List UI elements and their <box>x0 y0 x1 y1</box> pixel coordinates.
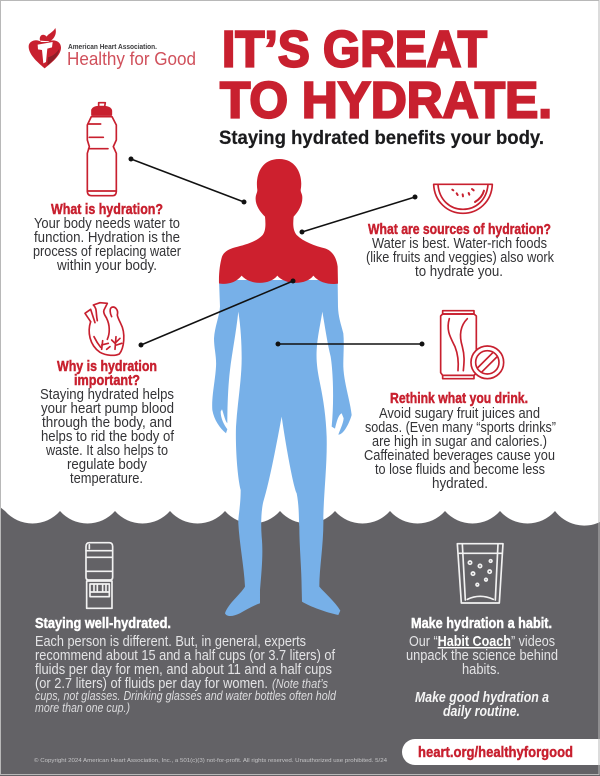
text block: what is hydration <box>33 202 181 274</box>
logo line 2: Healthy for Good <box>67 48 196 69</box>
text block: staying well-hydrated: (or 2.7 liters) of fluids per day for women. <box>35 676 268 692</box>
title <box>220 20 552 128</box>
logo line 1: American Heart Association. <box>68 44 157 51</box>
text block: staying well-hydrated: more than one cup.) <box>35 701 130 715</box>
subtitle: Staying hydrated benefits your body. <box>219 128 544 149</box>
callout line: what is hydration <box>128 156 246 204</box>
text block: what is hydration: within your body. <box>56 258 157 274</box>
callout line: why important <box>138 278 296 348</box>
text block: why is hydration important: helps to rid the body of <box>41 429 175 445</box>
text block: rethink what you drink <box>364 391 556 492</box>
copyright: © Copyright 2024 American Heart Association, Inc., a 501(c)(3) not-for-profit. All rights reserved. Unauthorized use prohibited. 5/24 <box>34 757 387 764</box>
text block: staying well-hydrated: fluids per day for men, and about 11 and a half cups <box>35 662 332 678</box>
human body figure <box>212 159 352 616</box>
text block: staying well-hydrated: Staying well-hydrated. <box>35 616 171 632</box>
body: red head and shoulders <box>219 159 338 284</box>
text block: make hydration a habit: Make hydration a habit. <box>411 616 552 632</box>
text block: rethink what you drink: are high in sugar and calories.) <box>372 434 547 450</box>
icon: glass of water <box>457 544 503 603</box>
logo: American Heart Association Healthy for Good <box>29 28 196 69</box>
text block: staying well-hydrated: recommend about 15 and a half cups (or 3.7 liters) of <box>35 648 336 664</box>
text block: why is hydration important: temperature. <box>70 471 143 487</box>
icon: watermelon slice <box>434 184 492 213</box>
text block: why is hydration important: Why is hydration <box>57 359 157 375</box>
text block: sources of hydration: Water is best. Water-rich foods <box>372 236 547 252</box>
text block: sources of hydration: to hydrate you. <box>415 264 503 280</box>
text block: make hydration a habit: Our “Habit Coach” videos <box>409 634 555 650</box>
text block: rethink what you drink: sodas. (Even many “sports drinks” <box>365 420 556 436</box>
text block: why is hydration important: through the body, and <box>42 415 172 431</box>
text block: what is hydration: What is hydration? <box>51 202 163 218</box>
text block: why is hydration important: waste. It also helps to <box>45 443 168 459</box>
text block: rethink what you drink: Rethink what you drink. <box>390 391 528 407</box>
icon: water cooler <box>86 543 113 608</box>
text block: sources of hydration: What are sources of hydration? <box>368 222 551 238</box>
text block: sources of hydration <box>366 222 555 280</box>
text block: what is hydration: function. Hydration is the <box>34 230 180 246</box>
text block: why is hydration important: Staying hydrated helps <box>40 387 174 403</box>
text block: make hydration a habit: Make good hydration a <box>415 690 549 706</box>
text block: rethink what you drink: Avoid sugary fruit juices and <box>379 406 540 422</box>
text block: staying well-hydrated <box>35 616 337 715</box>
text block: rethink what you drink: Caffeinated beverages cause you <box>364 448 555 464</box>
text block: staying well-hydrated: (Note that’s <box>272 677 328 691</box>
gray wave footer background <box>0 507 600 776</box>
text block: rethink what you drink: to lose fluids and become less <box>375 462 545 478</box>
title: IT’S GREAT <box>222 20 487 78</box>
text block: staying well-hydrated: cups, not glasses. Drinking glasses and water bottles often hold <box>35 689 337 703</box>
text block: why is hydration important: your heart pump blood <box>41 401 174 417</box>
title: TO HYDRATE. <box>220 72 552 128</box>
body: blue water fill <box>212 280 352 616</box>
url pill: heart.org/healthyforgood <box>418 744 573 761</box>
text block: sources of hydration: (like fruits and veggies) also work <box>366 250 555 266</box>
text block: make hydration a habit: habits. <box>462 662 500 678</box>
text block: what is hydration: process of replacing water <box>33 244 181 260</box>
text block: why is hydration important: regulate body <box>67 457 148 473</box>
text block: staying well-hydrated: Each person is different. But, in general, experts <box>35 634 306 650</box>
text block: make hydration a habit: daily routine. <box>443 704 520 720</box>
text block: what is hydration: Your body needs water to <box>34 216 180 232</box>
text block: why is hydration important: important? <box>74 373 140 389</box>
icon: soda can with prohibition sign <box>441 311 504 379</box>
icon: water bottle <box>87 103 116 196</box>
text block: why is hydration important <box>40 359 175 487</box>
text block: make hydration a habit <box>406 616 558 720</box>
text block: make hydration a habit: unpack the science behind <box>406 648 558 664</box>
icon: heart and torch <box>29 28 61 68</box>
text block: rethink what you drink: hydrated. <box>432 476 488 492</box>
url pill <box>402 739 600 765</box>
callout line: rethink <box>276 342 424 346</box>
icon: human heart <box>85 303 124 355</box>
callout line: sources of hydration <box>300 194 418 234</box>
